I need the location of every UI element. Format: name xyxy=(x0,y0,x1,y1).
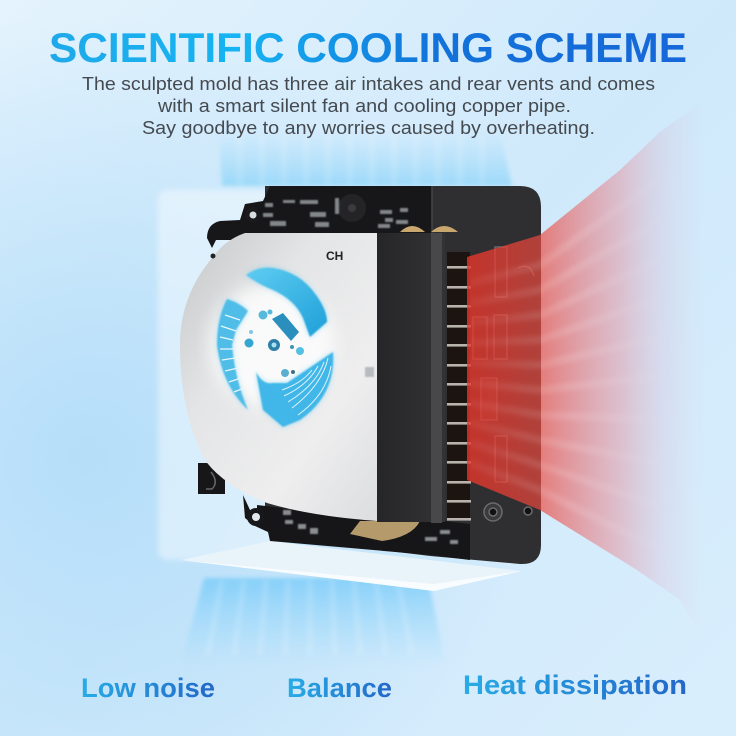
mini PC device xyxy=(180,186,541,564)
heat mark on shroud xyxy=(365,367,374,377)
hot air flow xyxy=(467,100,705,640)
fan blades xyxy=(217,268,333,427)
description text: The sculpted mold has three air intakes and rear vents and comes xyxy=(82,74,655,94)
silver fan shroud xyxy=(180,233,377,521)
small case marks: CH xyxy=(326,249,343,263)
label: low noise: Low noise xyxy=(81,673,215,703)
blade halo xyxy=(217,268,333,427)
heat sink block xyxy=(377,233,445,523)
copper pipe caps xyxy=(400,226,458,232)
cooling fins xyxy=(447,252,471,521)
top circuit board xyxy=(207,186,432,248)
fan hub xyxy=(244,310,304,377)
fan glow xyxy=(210,283,334,407)
rear ports xyxy=(473,247,534,521)
top cool air flow xyxy=(218,130,512,186)
label: heat dissipation: Heat dissipation xyxy=(463,670,687,700)
SD card xyxy=(198,463,225,494)
glass base plate xyxy=(181,541,522,591)
title: SCIENTIFIC COOLING SCHEME xyxy=(49,24,687,71)
blade: bottom xyxy=(256,352,333,427)
description text xyxy=(82,74,655,138)
small case marks xyxy=(210,249,343,263)
blade: left xyxy=(217,299,248,410)
description text: Say goodbye to any worries caused by overheating. xyxy=(142,118,595,138)
glass panel behind device xyxy=(158,190,288,560)
rear case xyxy=(265,186,541,564)
bottom cool air flow xyxy=(180,578,446,668)
blade: top xyxy=(246,268,327,337)
bottom circuit board xyxy=(243,495,470,560)
label: balance: Balance xyxy=(287,673,392,703)
description text: with a smart silent fan and cooling copper pipe. xyxy=(157,96,571,116)
